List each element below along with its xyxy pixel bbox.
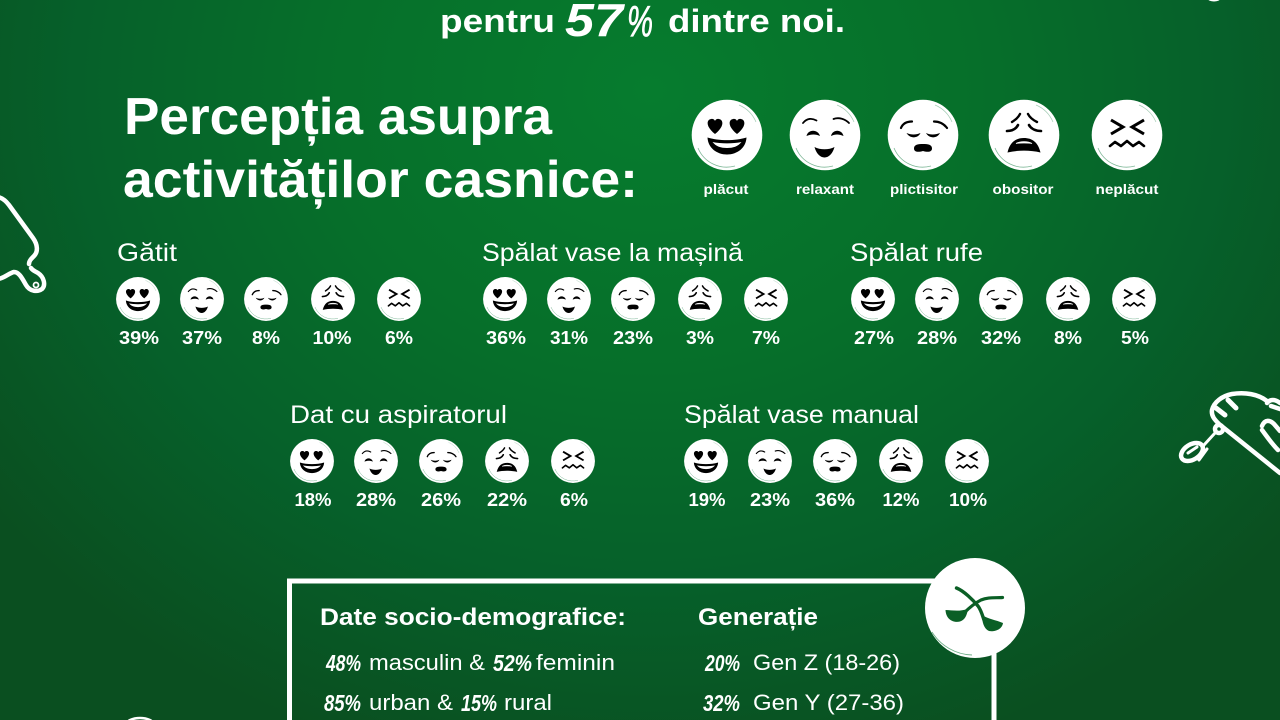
legend item: neplăcut: neplăcut <box>1096 182 1159 197</box>
panel: Gătit: 6% <box>385 327 413 348</box>
row: gender: masculin & <box>369 650 485 675</box>
panel: Spălat rufe: 5% <box>1121 327 1149 348</box>
legend item: relaxant: relaxant <box>796 182 855 197</box>
panel: Spălat vase manual: Spălat vase manual <box>684 401 919 429</box>
row: gender: 52% <box>493 650 532 676</box>
panel: Gătit: 10% <box>312 327 352 348</box>
panel: Spălat rufe: 8% <box>1054 327 1082 348</box>
panel: Spălat rufe: 28% <box>917 327 957 348</box>
row: Gen Y <box>703 690 904 716</box>
legend item: neplăcut <box>1092 100 1162 197</box>
section title: Percepția asupra <box>124 88 553 146</box>
icon: crossed spoons badge <box>925 558 1025 658</box>
panel: Spălat vase la mașină: 3% <box>686 327 714 348</box>
panel: Spălat vase manual: 10% <box>949 489 987 510</box>
panel: Spălat rufe: 27% <box>854 327 894 348</box>
row: gender: 48% <box>325 650 361 676</box>
panel: Spălat vase la mașină: Spălat vase la mașină <box>482 239 743 267</box>
panel: Gătit: Gătit <box>117 239 177 267</box>
legend item: plăcut: plăcut <box>704 182 749 197</box>
row: gender <box>325 650 615 676</box>
row: residence <box>324 690 552 716</box>
panel: Dat cu aspiratorul: Dat cu aspiratorul <box>290 401 507 429</box>
panel: Spălat vase la mașină: 31% <box>550 327 588 348</box>
row: Gen Z: 20% <box>704 650 740 676</box>
row: Gen Z <box>704 650 900 676</box>
panel: Spălat vase la mașină: 23% <box>613 327 653 348</box>
panel: Gătit: 37% <box>182 327 222 348</box>
section title <box>123 88 638 209</box>
panel: Gătit: 39% <box>119 327 159 348</box>
heading: date socio-demografice: Date socio-demografice: <box>320 604 626 631</box>
row: Gen Y: 32% <box>703 690 740 716</box>
panel: Spălat vase la mașină: 7% <box>752 327 780 348</box>
panel: Spălat vase la mașină <box>482 239 788 348</box>
panel: Dat cu aspiratorul: 26% <box>421 489 461 510</box>
icon: whisk outline at left <box>0 197 44 291</box>
legend item: plictisitor <box>888 100 959 197</box>
top headline <box>440 0 653 46</box>
panel: Spălat vase manual: 19% <box>688 489 726 510</box>
icon: hand mixer at right <box>1178 393 1280 473</box>
headline end: dintre noi. <box>668 3 845 39</box>
panel: socio-demographic box <box>290 581 994 720</box>
icon: cropped shape bottom left <box>126 718 154 720</box>
row: gender: feminin <box>536 650 615 675</box>
panel: Dat cu aspiratorul: 18% <box>294 489 332 510</box>
panel: Spălat vase manual: 36% <box>815 489 855 510</box>
row: Gen Z: Gen Z (18-26) <box>753 650 900 675</box>
row: residence: rural <box>504 690 552 715</box>
panel: Spălat vase la mașină: 36% <box>486 327 526 348</box>
legend item: plăcut <box>692 100 762 197</box>
panel: Spălat rufe: 32% <box>981 327 1021 348</box>
legend item: relaxant <box>790 100 860 197</box>
panel: Spălat rufe: Spălat rufe <box>850 239 983 267</box>
panel: Spălat rufe <box>850 239 1156 348</box>
panel: Gătit: 8% <box>252 327 280 348</box>
panel: Gătit <box>116 239 421 348</box>
row: residence: 85% <box>324 690 361 716</box>
panel: Dat cu aspiratorul <box>290 401 595 510</box>
icon: cropped shape top right <box>1208 0 1220 2</box>
legend: emotion scale <box>692 100 1162 197</box>
panel: Spălat vase manual: 23% <box>750 489 790 510</box>
row: Gen Y: Gen Y (27-36) <box>753 690 904 715</box>
row: residence: urban & <box>369 690 453 715</box>
row: residence: 15% <box>461 690 497 716</box>
panel: Spălat vase manual: 12% <box>882 489 920 510</box>
legend item: obositor <box>989 100 1059 197</box>
legend item: plictisitor: plictisitor <box>890 182 959 197</box>
legend item: obositor: obositor <box>992 182 1054 197</box>
panel: Dat cu aspiratorul: 28% <box>356 489 396 510</box>
panel: Dat cu aspiratorul: 22% <box>487 489 527 510</box>
heading: generație: Generație <box>698 604 818 631</box>
panel: Spălat vase manual <box>684 401 989 510</box>
top headline: pentru <box>440 3 555 39</box>
panel: Dat cu aspiratorul: 6% <box>560 489 588 510</box>
section title: activităților casnice: <box>123 151 638 209</box>
